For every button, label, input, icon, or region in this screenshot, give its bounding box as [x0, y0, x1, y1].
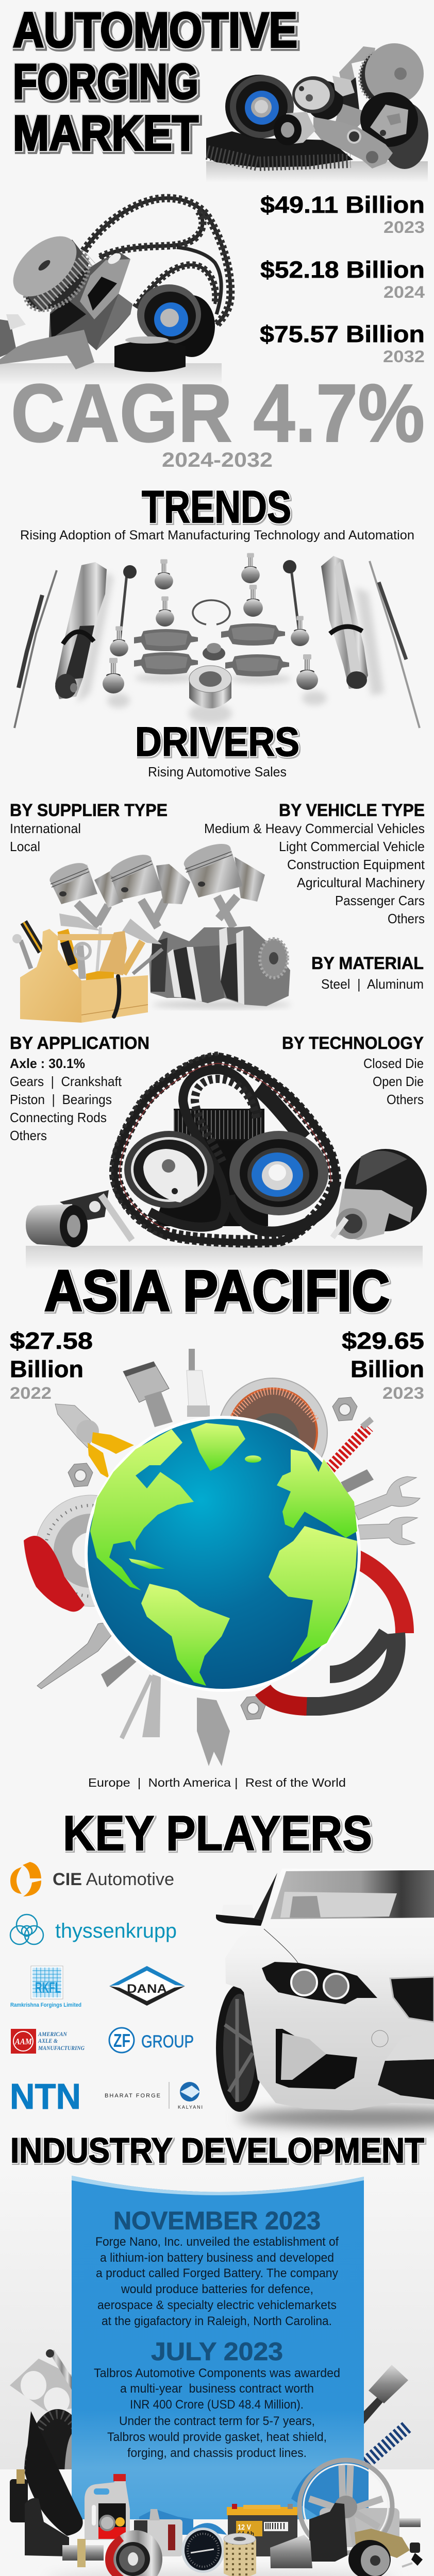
- grille: [390, 1977, 434, 2022]
- left link rod: [110, 565, 137, 656]
- logo: American Axle: AXLE &: [38, 2038, 58, 2044]
- by application: Piston | Bearings: [10, 1092, 112, 1107]
- piston: [123, 1362, 173, 1427]
- starter motor right: [270, 2535, 312, 2568]
- by supplier type: BY SUPPLIER TYPE: [10, 801, 168, 820]
- by application: [10, 1033, 149, 1143]
- gasket: [10, 2359, 72, 2414]
- backdrop wall: [0, 2166, 434, 2469]
- battery: 12 V: [238, 2523, 251, 2532]
- value 2024: [260, 257, 425, 301]
- by vehicle type: Construction Equipment: [287, 857, 425, 872]
- by application: Others: [10, 1128, 47, 1143]
- car body: [225, 1869, 434, 2110]
- fog detail: [372, 2030, 388, 2047]
- asia pacific 2023 value: 2023: [382, 1384, 424, 1402]
- asia pacific 2023 value: [342, 1328, 424, 1402]
- right mudflap: [309, 2503, 347, 2562]
- right link rod: [283, 560, 309, 646]
- screwdrivers: [120, 1674, 161, 1739]
- south america: [141, 1584, 230, 1686]
- tyre: [24, 2409, 91, 2537]
- connector: [10, 2469, 28, 2522]
- logo: Ramkrishna Forgings: RKFL: [35, 1979, 61, 1996]
- left tensioner pulley: [124, 1131, 214, 1208]
- title: MARKET: [13, 106, 198, 161]
- CAGR period: 2024-2032: [162, 449, 273, 471]
- november 2023: [95, 2207, 339, 2328]
- black roller: [114, 336, 186, 372]
- pump body: [49, 251, 132, 350]
- logo: Dana: [109, 1966, 185, 2006]
- by vehicle type: Others: [388, 911, 425, 926]
- drivers text: Rising Automotive Sales: [148, 764, 287, 779]
- right blue pulley: [229, 1131, 328, 1215]
- november 2023: NOVEMBER 2023: [113, 2207, 321, 2235]
- logo: ZF Group: GROUP: [141, 2032, 194, 2052]
- connecting rods: [77, 896, 237, 927]
- left shock absorber: [55, 562, 107, 699]
- value 2024: $52.18 Billion: [260, 257, 425, 283]
- toothed belt: [206, 131, 353, 167]
- asia pacific 2022 value: Billion: [10, 1356, 84, 1382]
- left brass solenoid: [62, 2539, 104, 2567]
- logo: Ramkrishna Forgings: [10, 1966, 81, 2008]
- muffler and axle: [320, 2508, 421, 2547]
- left air intake: [276, 2029, 357, 2089]
- heading: trends: TRENDS: [142, 481, 291, 532]
- piston one: [47, 859, 97, 904]
- greenland: [191, 1423, 245, 1471]
- headlight: [262, 1962, 377, 2004]
- floor: [0, 2469, 434, 2576]
- by vehicle type: Passenger Cars: [335, 893, 425, 908]
- back pistons: [94, 857, 265, 908]
- by vehicle type: Medium & Heavy Commercial Vehicles: [204, 821, 425, 836]
- crankshaft: [149, 926, 291, 1008]
- image: suspension and brake parts: [14, 553, 420, 728]
- image: white car: [216, 1869, 434, 2128]
- pliers handle: [114, 976, 119, 1016]
- blue panel: [72, 2176, 364, 2519]
- inner S belt: [149, 1070, 335, 1232]
- image: timing belt kit: [26, 1054, 427, 1269]
- battery: [227, 2504, 297, 2556]
- trends text: Rising Adoption of Smart Manufacturing Technology and Automation: [20, 528, 414, 543]
- by application: Gears | Crankshaft: [10, 1074, 122, 1089]
- battery: 64 Ah: [238, 2530, 254, 2538]
- cutting pliers: [55, 1404, 134, 1479]
- inner red cord: [120, 1063, 331, 1230]
- north america: [90, 1429, 194, 1590]
- outer belt: [111, 1054, 336, 1242]
- red caliper: [24, 1536, 85, 1612]
- by technology: Open Die: [373, 1074, 424, 1089]
- spin-on oil filter: [348, 2540, 391, 2576]
- idler blue pulley: [137, 284, 215, 357]
- alternator: [134, 2509, 182, 2556]
- windshield: [271, 1870, 434, 1919]
- right wiper: [370, 561, 420, 728]
- by supplier type: Local: [10, 839, 40, 854]
- red shock: [330, 1417, 374, 1468]
- value 2032: 2032: [383, 347, 425, 366]
- by supplier type: International: [10, 821, 81, 836]
- july 2023: Talbros Automotive Components was awarded: [94, 2366, 340, 2380]
- november 2023: aerospace & specialty electric vehiclemarkets: [97, 2298, 337, 2312]
- value 2032: $75.57 Billion: [260, 321, 425, 347]
- right tensioner: [332, 1149, 427, 1240]
- market size values: [260, 192, 425, 366]
- logo: Bharat Forge Kalyani: KALYANI: [178, 2105, 203, 2110]
- bolt: [338, 1469, 374, 1494]
- steering wheel: [263, 1558, 405, 1706]
- image: belt pulleys top right: [206, 43, 428, 182]
- by material: Steel | Aluminum: [321, 976, 424, 992]
- by application: Connecting Rods: [10, 1110, 107, 1125]
- oil filter cartridge: [224, 2533, 256, 2576]
- piston three: [107, 850, 162, 900]
- piston five: [181, 839, 243, 897]
- oil jug: [85, 2474, 130, 2540]
- right pulley: [360, 92, 428, 169]
- july 2023: forging, and chassis product lines.: [127, 2446, 307, 2460]
- wheel bearing: [189, 666, 231, 708]
- middle tensioner: [292, 76, 355, 120]
- logo: Bharat Forge Kalyani: BHARAT FORGE: [105, 2093, 160, 2099]
- image: timing belt and water pump: [0, 198, 230, 385]
- value 2023: 2023: [383, 218, 425, 236]
- july 2023: JULY 2023: [151, 2338, 283, 2366]
- brass starter: [355, 2529, 410, 2558]
- africa: [269, 1526, 357, 1663]
- november 2023: a lithium-ion battery business and developed: [100, 2251, 334, 2265]
- bolt lower: [101, 1654, 137, 1687]
- cuba: [129, 1558, 165, 1569]
- logo: CIE Automotive: CIE Automotive: [53, 1870, 174, 1889]
- november 2023: would produce batteries for defence,: [121, 2282, 313, 2296]
- brake disc: [35, 1495, 146, 1606]
- by application: Axle : 30.1%: [10, 1056, 85, 1071]
- wrenches: [353, 1477, 420, 1545]
- other regions: Europe | North America | Rest of the World: [88, 1776, 346, 1789]
- title: [13, 3, 297, 161]
- november 2023: Forge Nano, Inc. unveiled the establishment of: [95, 2235, 339, 2249]
- brake disc: [105, 2530, 162, 2576]
- centre air intake: [378, 2059, 434, 2099]
- by vehicle type: BY VEHICLE TYPE: [279, 801, 425, 820]
- asia pacific 2022 value: [10, 1328, 93, 1402]
- logo: American Axle: MANUFACTURING: [38, 2045, 85, 2052]
- logo: American Axle: [11, 2029, 85, 2054]
- box right end panel: [99, 931, 127, 975]
- asia pacific 2022 value: 2022: [10, 1384, 52, 1402]
- logo: ZF Group: ZF: [113, 2030, 130, 2051]
- tools: [12, 913, 162, 979]
- spark plug: [187, 1349, 210, 1417]
- left wiper: [14, 570, 57, 728]
- parts behind panel: [10, 2349, 408, 2537]
- november 2023: a product called Forged Battery. The company: [96, 2266, 338, 2280]
- bottom parts line-up: [10, 2411, 423, 2576]
- title: FORGING: [13, 54, 198, 109]
- by technology: Closed Die: [363, 1056, 424, 1071]
- image: wooden toolbox: [12, 913, 162, 1023]
- alloy wheel: [299, 2460, 392, 2553]
- speedometer: [218, 1378, 327, 1487]
- logo: American Axle: AMERICAN: [38, 2031, 68, 2038]
- by technology: BY TECHNOLOGY: [282, 1033, 424, 1053]
- value 2023: $49.11 Billion: [260, 192, 425, 218]
- by vehicle type: Light Commercial Vehicle: [279, 839, 425, 854]
- yellow tool heads: [86, 971, 114, 981]
- globe: [85, 1416, 361, 1692]
- speedometer gauge: [181, 2528, 225, 2573]
- bracket and toothed disc: [330, 43, 424, 129]
- by vehicle type: [204, 801, 425, 926]
- july 2023: Under the contract term for 5-7 years,: [119, 2414, 315, 2428]
- by technology: Others: [387, 1092, 424, 1107]
- box front panel: [81, 975, 148, 1023]
- logo: ZF Group: [109, 2028, 194, 2053]
- belt loops: [84, 198, 230, 325]
- by vehicle type: Agricultural Machinery: [297, 875, 425, 890]
- box handle: [58, 934, 114, 940]
- july 2023: [94, 2338, 340, 2460]
- pump toothed pulley: [2, 225, 99, 321]
- car keys: [402, 2543, 423, 2567]
- july 2023: Talbros would provide gasket, heat shield,: [107, 2430, 327, 2444]
- asia pacific 2022 value: $27.58: [10, 1328, 93, 1354]
- logo: Dana: DANA: [127, 1982, 167, 1996]
- logo: American Axle: AAM: [14, 2037, 32, 2046]
- combination pliers: [197, 1698, 230, 1766]
- july 2023: INR 400 Crore (USD 48.4 Million).: [130, 2398, 304, 2412]
- by technology: [282, 1033, 424, 1107]
- a-pillar: [254, 1873, 277, 1920]
- november 2023: at the gigafactory in Raleigh, North Carolina.: [102, 2314, 332, 2328]
- logo: Bharat Forge Kalyani: [105, 2082, 203, 2110]
- image: tools around globe: [24, 1349, 420, 1766]
- tyre lower: [25, 2411, 83, 2536]
- heading: asia pacific: ASIA PACIFIC: [44, 1259, 390, 1323]
- value 2032: [260, 321, 425, 366]
- image: pistons and crankshaft: [47, 839, 291, 1008]
- title: AUTOMOTIVE: [13, 3, 297, 58]
- side mirror: [216, 1905, 263, 1926]
- by supplier type: [10, 801, 168, 854]
- heading: key players: KEY PLAYERS: [63, 1806, 372, 1861]
- flange nut: [203, 643, 225, 660]
- box left end panel: [20, 929, 81, 1023]
- logo: Ramkrishna Forgings: Ramkrishna Forgings Limited: [10, 2002, 81, 2008]
- value 2023: [260, 192, 425, 236]
- snap ring: [193, 600, 230, 624]
- by material: [311, 954, 424, 992]
- blue pulley: [225, 75, 294, 139]
- iceland: [245, 1455, 261, 1463]
- right shock absorber: [321, 556, 368, 689]
- panel silhouettes: [139, 2463, 369, 2535]
- wheel spring and piston: [364, 2365, 408, 2463]
- logo: thyssenkrupp: [10, 1914, 177, 1944]
- left mudflap: [25, 2498, 69, 2556]
- heading: drivers: DRIVERS: [135, 719, 299, 765]
- by material: BY MATERIAL: [311, 954, 424, 973]
- arm: [0, 314, 94, 369]
- logo: CIE Automotive: [10, 1862, 174, 1896]
- idler arm: [274, 112, 393, 168]
- long nose pliers: [37, 1623, 113, 1689]
- asia pacific 2023 value: Billion: [350, 1356, 424, 1382]
- europe: [277, 1449, 357, 1538]
- left idler roller: [26, 1190, 132, 1247]
- by application: BY APPLICATION: [10, 1033, 149, 1053]
- asia pacific 2023 value: $29.65: [342, 1328, 424, 1354]
- logo: thyssenkrupp: thyssenkrupp: [55, 1920, 177, 1942]
- logo: NTN: NTN: [10, 2076, 81, 2116]
- wheel: [216, 1984, 263, 2112]
- central toothed pulley: [155, 1109, 268, 1226]
- shock top: [46, 2349, 72, 2391]
- value 2024: 2024: [383, 283, 425, 301]
- july 2023: a multi-year business contract worth: [120, 2382, 314, 2396]
